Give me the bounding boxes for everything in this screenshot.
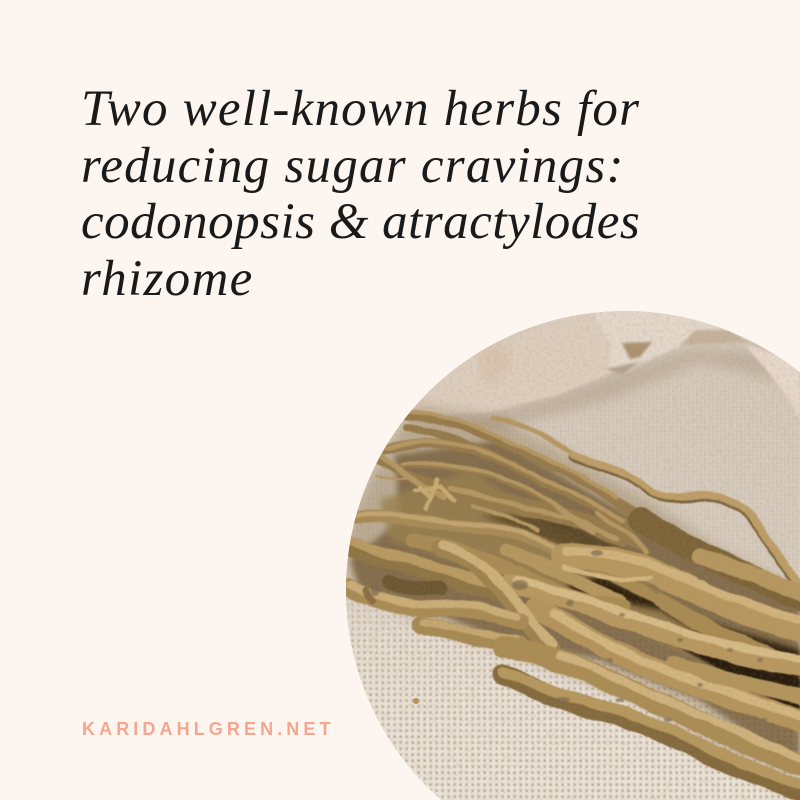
upper strands bbox=[376, 413, 641, 550]
back thick roots bbox=[640, 520, 800, 600]
root mass shadow bbox=[347, 405, 800, 800]
title: Two well-known herbs for bbox=[81, 81, 640, 137]
lower left roots bbox=[420, 625, 520, 643]
title: reducing sugar cravings: bbox=[81, 138, 625, 194]
photo: dried codonopsis roots on linen in a circular crop bbox=[346, 311, 800, 800]
knot bbox=[415, 480, 453, 510]
thick root 1 bbox=[563, 556, 800, 630]
linen background bbox=[340, 300, 800, 800]
thick root 4 bbox=[503, 647, 800, 767]
left stems bbox=[353, 516, 560, 553]
roots bbox=[347, 412, 800, 793]
loose foreground root bbox=[503, 675, 800, 793]
title: codonopsis & atractylodes bbox=[81, 194, 640, 250]
thick root 3 bbox=[537, 608, 800, 723]
speckles on roots bbox=[370, 550, 767, 722]
surface grain bbox=[340, 300, 800, 800]
long thin root to the right bbox=[573, 457, 798, 585]
woven foreground cloth bbox=[346, 598, 800, 800]
website url: KARIDAHLGREN.NET bbox=[82, 719, 335, 739]
crossing flat strand bbox=[440, 548, 550, 647]
thick root 2 bbox=[510, 583, 800, 667]
folded cloth at the top bbox=[416, 311, 800, 429]
title: rhizome bbox=[81, 250, 254, 306]
crumb bbox=[413, 698, 419, 704]
title bbox=[81, 81, 640, 306]
